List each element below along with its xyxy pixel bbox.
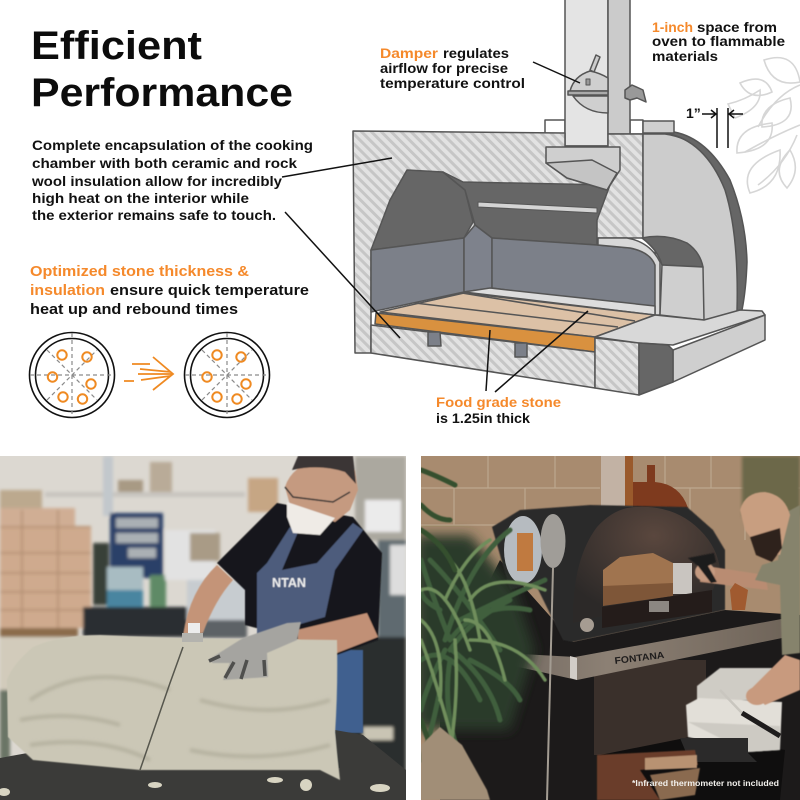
left arm: [183, 565, 233, 635]
callout: clearance: [652, 19, 785, 64]
callout: damper: [380, 45, 525, 91]
text block: optimized stone thickness: Optimized stone thickness &: [30, 264, 250, 280]
counter logo: FONTANA: [614, 650, 665, 667]
icon: decorative leaves: [728, 58, 800, 193]
vent dome: [642, 236, 703, 267]
thermometer: [688, 553, 717, 583]
callout: food grade stone: is 1.25in thick: [436, 410, 530, 426]
pizza brush paddle: [504, 516, 542, 584]
glasses: [285, 487, 350, 502]
plant: [421, 470, 545, 790]
base shelf front: [673, 315, 765, 382]
vent box: [660, 265, 704, 320]
right arm: [297, 613, 378, 653]
lower arm: [750, 655, 800, 705]
callout: clearance: materials: [652, 48, 718, 64]
chamber left wall: [371, 238, 464, 312]
floor channels: [428, 332, 527, 357]
text block: encapsulation description: [31, 138, 313, 223]
dark under-counter: [440, 560, 800, 800]
mask: [287, 502, 335, 535]
rock: [421, 727, 490, 800]
table: [0, 730, 406, 800]
oven front arch: [578, 507, 720, 602]
text block: optimized stone thickness: heat up and rebound times: [30, 302, 238, 318]
note: *Infrared thermometer not included: [632, 779, 779, 788]
sleeve end: [182, 633, 203, 642]
glove fingertips: [209, 656, 265, 679]
text block: optimized stone thickness: [30, 264, 309, 318]
front block: [595, 338, 639, 395]
head: [740, 492, 790, 555]
wool scraps: [0, 777, 390, 796]
callout: food grade stone: [436, 394, 561, 426]
diagram: oven cross-section: [353, 0, 765, 395]
head: [285, 460, 358, 522]
throat baffle: [546, 160, 617, 190]
hatched insulation shell: [353, 131, 643, 353]
arrow: heat transfer: [124, 357, 173, 390]
callout: clearance: 1-inch: [652, 19, 693, 35]
firewood logs: [597, 750, 700, 800]
oven door metal: [673, 563, 692, 594]
tongs: [720, 690, 780, 736]
text block: encapsulation description: the exterior remains safe to touch.: [32, 208, 276, 223]
wooden peel: [633, 465, 688, 508]
text block: encapsulation description: high heat on the interior while: [32, 191, 250, 206]
apron: [257, 523, 363, 635]
callout: clearance: space from: [697, 19, 777, 35]
oven opening: [603, 553, 673, 586]
lower apron: [335, 650, 363, 733]
rear floor strip: [464, 288, 655, 315]
oven dome: [492, 505, 725, 642]
oven hearth: [603, 583, 673, 606]
text block: encapsulation description: chamber with both ceramic and rock: [32, 156, 298, 171]
title: Performance: [31, 71, 293, 115]
text block: encapsulation description: Complete encapsulation of the cooking: [32, 138, 313, 153]
glove: [208, 622, 301, 680]
callout: damper: airflow for precise: [380, 60, 508, 76]
text block: encapsulation description: wool insulation allow for incredibly: [31, 174, 283, 189]
shirt: [755, 505, 800, 655]
hair: [292, 456, 356, 484]
flue: [601, 456, 625, 506]
throat: [546, 147, 620, 190]
floor insulation: [371, 325, 595, 388]
door arch: [598, 238, 660, 315]
callout: clearance: oven to flammable: [652, 33, 785, 49]
photo: oven with infrared thermometer: [415, 456, 800, 800]
title: [31, 24, 293, 115]
rear panel: [594, 660, 706, 755]
copper pot: [730, 583, 748, 610]
food grade stone top: [380, 293, 655, 337]
icon: pizza after: [184, 332, 270, 418]
food grade stone slab: [375, 313, 595, 352]
upper arm: [700, 565, 768, 590]
shelf: [600, 735, 785, 800]
pizza peel: [540, 514, 566, 800]
damper knob: [625, 85, 646, 102]
callout: damper: regulates: [443, 45, 509, 61]
leader lines: [282, 62, 588, 392]
oven lower panel: [602, 590, 712, 628]
wall: [421, 456, 800, 800]
black tray: [680, 738, 757, 762]
chamber right wall: [492, 238, 657, 310]
callout: damper: temperature control: [380, 75, 525, 91]
wrist cuff: [188, 623, 200, 633]
roll shading: [20, 677, 330, 760]
one-inch clearance marker: [686, 105, 743, 148]
one-inch clearance marker: 1”: [686, 105, 701, 121]
callout: damper: Damper: [380, 45, 439, 61]
text block: optimized stone thickness: ensure quick temperature: [110, 283, 309, 299]
text block: optimized stone thickness: insulation: [30, 283, 105, 299]
plant backdrop: [415, 535, 535, 730]
rock wool roll: [7, 635, 340, 780]
roof slat: [478, 202, 597, 213]
base cut section: [639, 343, 673, 395]
dome exterior: [643, 121, 747, 320]
stainless counter: [522, 619, 782, 680]
shirt: [217, 503, 382, 655]
man: [688, 492, 800, 705]
callout: food grade stone: Food grade stone: [436, 394, 561, 410]
icon: pizza before: [30, 332, 114, 418]
chamber roof back: [443, 172, 610, 245]
workshop background: [0, 456, 406, 777]
pizza boxes: [686, 668, 782, 752]
beard: [750, 528, 782, 562]
worker: [183, 456, 382, 733]
chamber roof left: [371, 170, 473, 250]
roll seam: [140, 647, 183, 770]
chimney: [545, 0, 643, 146]
base shelf top: [595, 310, 765, 345]
oven knob: [580, 618, 594, 632]
climbing plant: [742, 456, 800, 516]
damper: [568, 55, 608, 113]
photo: worker with rock wool insulation: [0, 456, 406, 800]
title: Efficient: [31, 24, 202, 68]
shirt logo: NTAN: [272, 575, 306, 590]
chamber centre wall: [464, 225, 492, 292]
